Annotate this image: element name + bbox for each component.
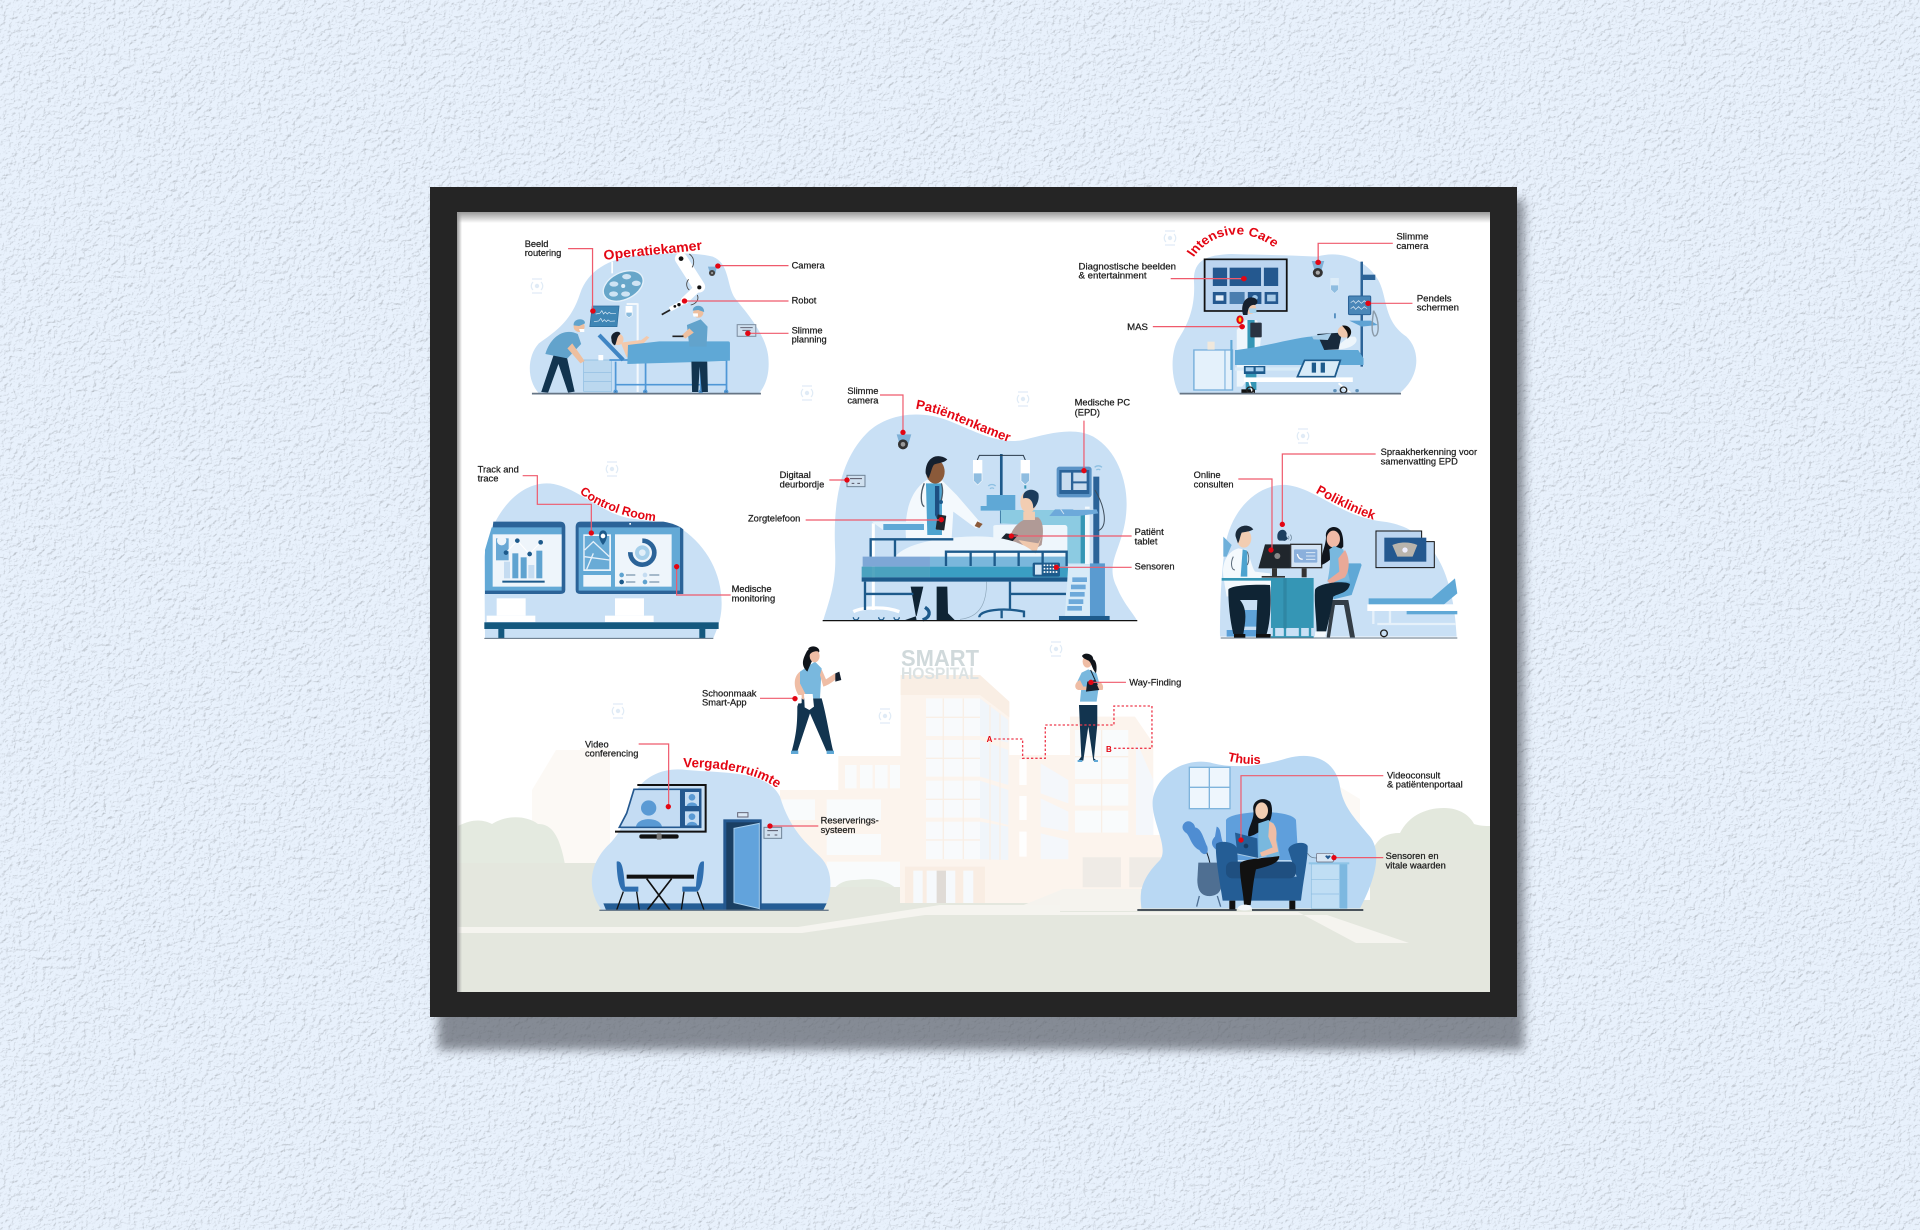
ground line <box>1180 391 1401 396</box>
pendant monitor <box>1349 296 1378 336</box>
labels: trace <box>478 474 498 484</box>
labels: & patiëntenportaal <box>1387 780 1463 790</box>
labels: Schoonmaak <box>702 688 756 698</box>
planning device <box>737 325 756 336</box>
labels: Way-Finding <box>1129 677 1181 687</box>
IV stand <box>626 303 638 392</box>
right bushes <box>1370 808 1490 926</box>
route A to B <box>987 706 1152 758</box>
medical PC <box>1049 466 1110 620</box>
labels <box>1079 232 1459 332</box>
door <box>723 813 762 910</box>
ground line <box>1137 907 1363 912</box>
ground line <box>599 908 829 912</box>
ceiling lamp <box>598 262 649 307</box>
panel: Control Room <box>478 465 775 639</box>
camera <box>1312 261 1324 277</box>
hospital building <box>780 675 1168 907</box>
labels: Robot <box>792 295 817 305</box>
labels: camera <box>1396 241 1429 251</box>
door plate <box>847 475 865 487</box>
labels: samenvatting EPD <box>1381 456 1458 466</box>
blob <box>592 769 830 910</box>
callouts <box>760 680 1126 701</box>
left bushes <box>458 817 566 870</box>
blob <box>484 483 722 638</box>
desk <box>1222 578 1314 637</box>
labels <box>702 677 1181 708</box>
callouts <box>1238 776 1383 860</box>
callouts <box>639 744 818 829</box>
labels: Digitaal <box>780 470 811 480</box>
labels: Slimme <box>847 386 878 396</box>
labels: routering <box>525 248 561 258</box>
camera <box>708 267 717 276</box>
surgical robot <box>662 254 701 315</box>
labels: systeem <box>821 825 856 835</box>
wall panel edge <box>1081 510 1087 563</box>
video conference screen <box>615 785 706 832</box>
left monitor <box>485 522 565 594</box>
labels: Sensoren en <box>1386 851 1439 861</box>
doctor <box>903 456 983 621</box>
white footpath <box>457 905 1409 943</box>
far background buildings <box>532 748 1360 878</box>
table and chairs <box>617 861 704 910</box>
screen <box>1291 544 1322 577</box>
wall screen <box>1205 259 1287 311</box>
cabinet <box>1194 342 1232 390</box>
IV pole and bags <box>973 454 1030 523</box>
laptop <box>1258 544 1290 578</box>
IV bag <box>1330 278 1339 294</box>
armchair <box>1216 812 1308 910</box>
nurse left <box>541 319 585 393</box>
map pin <box>599 530 607 545</box>
callouts <box>1238 454 1376 553</box>
pale forecourt <box>1009 889 1141 911</box>
labels <box>585 739 879 835</box>
labels: Reserverings- <box>821 816 879 826</box>
panel: Thuis <box>1137 752 1463 911</box>
labels: Diagnostische beelden <box>1079 262 1176 272</box>
cart <box>584 355 611 391</box>
wall panel behind the bed <box>1001 510 1087 563</box>
labels: conferencing <box>585 749 638 759</box>
blob <box>1220 485 1457 637</box>
ground <box>457 850 1490 992</box>
panel: Operatiekamer <box>525 239 827 394</box>
labels: monitoring <box>732 593 775 603</box>
callouts <box>806 395 1132 570</box>
blob <box>1173 254 1416 393</box>
title: Thuis <box>1229 752 1260 764</box>
inner frame shadows <box>457 212 1490 992</box>
monitor <box>590 306 619 327</box>
labels <box>478 465 775 603</box>
patient tablet user <box>993 490 1067 557</box>
title: Vergaderruimte <box>683 758 780 787</box>
building name HOSPITAL: HOSPITAL <box>901 664 979 683</box>
labels: & entertainment <box>1079 271 1147 281</box>
sensor unit <box>1033 563 1060 577</box>
pendant pole <box>1335 262 1375 367</box>
labels: MAS <box>1127 322 1148 332</box>
panel: Vergaderruimte <box>584 739 879 911</box>
labels: Smart-App <box>702 698 747 708</box>
woman <box>1237 799 1280 910</box>
labels <box>1194 447 1477 489</box>
labels: Sensoren <box>1135 561 1175 571</box>
labels: Slimme <box>1396 232 1428 242</box>
poster background: ground, bushes and hospital building <box>457 675 1490 992</box>
labels <box>748 386 1175 571</box>
bed <box>599 335 728 393</box>
video bar <box>639 833 679 840</box>
blob <box>1141 756 1376 908</box>
labels: Medische PC <box>1075 398 1130 408</box>
room plate <box>764 827 782 838</box>
labels: Slimme <box>792 325 823 335</box>
way-finding person <box>1075 654 1103 762</box>
labels: Online <box>1194 470 1221 480</box>
title: Patiëntenkamer <box>916 400 1011 442</box>
callouts <box>568 249 789 336</box>
patient blanket <box>895 536 1040 558</box>
labels: Patiënt <box>1135 527 1164 537</box>
labels: (EPD) <box>1075 407 1100 417</box>
labels: Video <box>585 739 609 749</box>
right monitor <box>576 522 683 594</box>
route A to B: B <box>1106 745 1112 754</box>
plant <box>1182 821 1223 907</box>
building name SMART: SMART <box>901 645 979 671</box>
labels <box>525 239 827 345</box>
doctor with tablet <box>1237 297 1262 394</box>
labels <box>1386 770 1463 870</box>
window <box>1189 767 1230 809</box>
monitor stands and desk <box>484 598 719 638</box>
labels: tablet <box>1135 536 1158 546</box>
patient <box>611 332 649 357</box>
ground line <box>532 391 761 396</box>
doctor <box>1223 526 1272 638</box>
camera <box>897 434 911 449</box>
labels: consulten <box>1194 479 1234 489</box>
frame drop shadow <box>438 200 1524 1050</box>
labels: Pendels <box>1417 294 1452 303</box>
cleaner <box>791 646 841 754</box>
labels: Videoconsult <box>1387 770 1440 780</box>
labels: Camera <box>792 261 826 271</box>
cleaner figure and way-finding figure <box>702 646 1181 762</box>
ground line <box>823 619 1137 623</box>
title: Operatiekamer <box>604 242 702 262</box>
labels: Zorgtelefoon <box>748 514 800 524</box>
ground line <box>1221 636 1457 639</box>
patient bed <box>862 539 1068 620</box>
labels: Track and <box>478 465 519 475</box>
patient <box>1237 325 1357 350</box>
labels: Beeld <box>525 239 548 249</box>
patient <box>1315 527 1362 637</box>
MAS device <box>1236 315 1244 324</box>
black picture frame <box>430 187 1517 1017</box>
labels: Medische <box>732 584 772 594</box>
wifi icons <box>531 231 1309 723</box>
labels: Spraakherkenning voor <box>1381 447 1477 457</box>
bedside table <box>853 522 924 620</box>
blob <box>823 415 1137 620</box>
bed <box>1231 340 1364 393</box>
wall picture <box>1376 531 1434 568</box>
callouts <box>1153 243 1412 329</box>
labels: vitale waarden <box>1386 860 1446 870</box>
skirting <box>603 903 827 910</box>
title: Control Room <box>581 488 656 522</box>
poster paper <box>457 212 1490 992</box>
panel: Intensive Care <box>1078 226 1459 394</box>
examination bed <box>1367 578 1457 637</box>
labels: deurbordje <box>780 479 824 489</box>
route A to B: A <box>987 735 993 744</box>
side table with sensor <box>1308 853 1349 909</box>
callouts <box>523 476 731 595</box>
blob <box>530 253 769 393</box>
laptop <box>1235 833 1267 858</box>
panel: Polikliniek <box>1194 447 1478 638</box>
infusion pump <box>981 484 1015 511</box>
title: Intensive Care <box>1186 226 1278 257</box>
labels: camera <box>847 395 879 405</box>
labels: planning <box>792 335 827 345</box>
distant tree <box>833 879 897 890</box>
blanket <box>627 341 730 364</box>
labels: schermen <box>1417 303 1459 313</box>
title: Polikliniek <box>1316 485 1376 520</box>
panel: Patiëntenkamer <box>748 386 1175 622</box>
nurse right <box>672 306 708 392</box>
voice icon <box>1277 530 1291 541</box>
